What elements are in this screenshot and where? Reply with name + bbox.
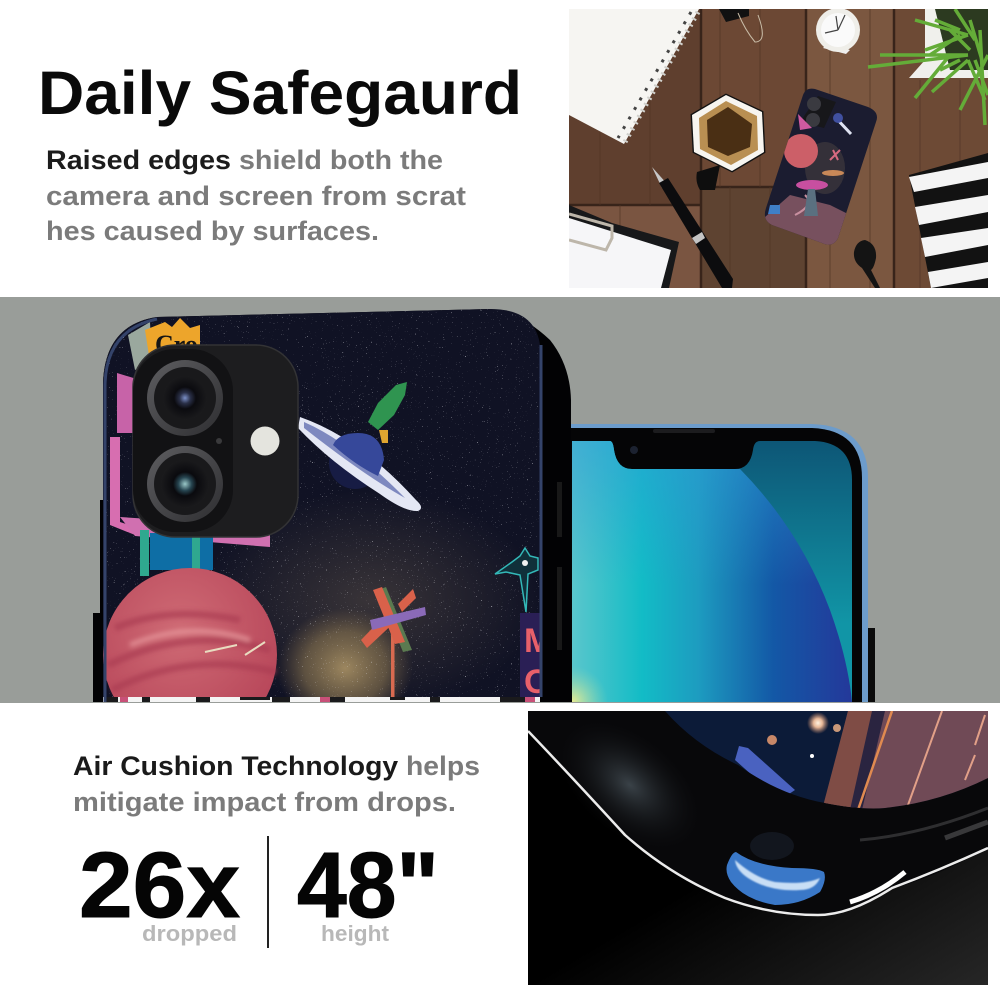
plant — [868, 9, 988, 125]
stat: dropped: dropped — [142, 921, 237, 946]
camera module — [133, 345, 298, 537]
text block: air cushion — [73, 751, 480, 817]
galaxy window with road — [660, 711, 990, 815]
neon M sign — [520, 613, 540, 697]
clock — [816, 8, 860, 54]
text block: raised edges description: Raised edges shield both the — [46, 145, 443, 175]
milky way — [238, 512, 506, 697]
grey band — [0, 297, 1000, 703]
star sign — [495, 548, 538, 612]
striped notebook — [909, 153, 988, 288]
star field — [100, 305, 550, 705]
stat: height: 48" — [297, 833, 439, 937]
text block: air cushion: Air Cushion Technology helps — [73, 751, 480, 781]
stat: dropped: 26x — [79, 833, 240, 937]
stat: height: height — [321, 921, 390, 946]
text block: air cushion: mitigate impact from drops. — [73, 787, 456, 817]
neon M sign: M — [524, 622, 552, 660]
red planet — [103, 568, 279, 697]
saturn planet with cactus — [298, 382, 421, 511]
text block: raised edges description — [46, 145, 466, 246]
case rim — [528, 692, 988, 915]
stat divider — [267, 836, 269, 948]
binder clip — [719, 9, 762, 42]
pen — [652, 167, 733, 288]
phone front — [560, 424, 875, 702]
bottom edge pattern — [103, 697, 540, 702]
coffee cup — [691, 93, 765, 190]
clipboard — [569, 205, 679, 288]
neon signs left: Cro — [155, 330, 198, 359]
spoon — [854, 240, 880, 288]
neon M sign: O — [524, 663, 550, 701]
phone back case — [93, 309, 571, 702]
title: Daily Safegaurd — [38, 59, 522, 127]
photo: phone on wooden desk — [569, 8, 988, 288]
text block: raised edges description: camera and screen from scrat — [46, 181, 466, 211]
photo: air cushion closeup — [528, 692, 990, 985]
white strip below band — [0, 703, 1000, 1000]
phone wallpaper — [572, 441, 852, 702]
text block: raised edges description: hes caused by surfaces. — [46, 216, 379, 246]
phone in photo — [764, 88, 877, 245]
neon signs left — [110, 318, 270, 576]
air bubble — [726, 832, 825, 905]
X sign — [361, 587, 426, 700]
notebook — [569, 9, 699, 144]
